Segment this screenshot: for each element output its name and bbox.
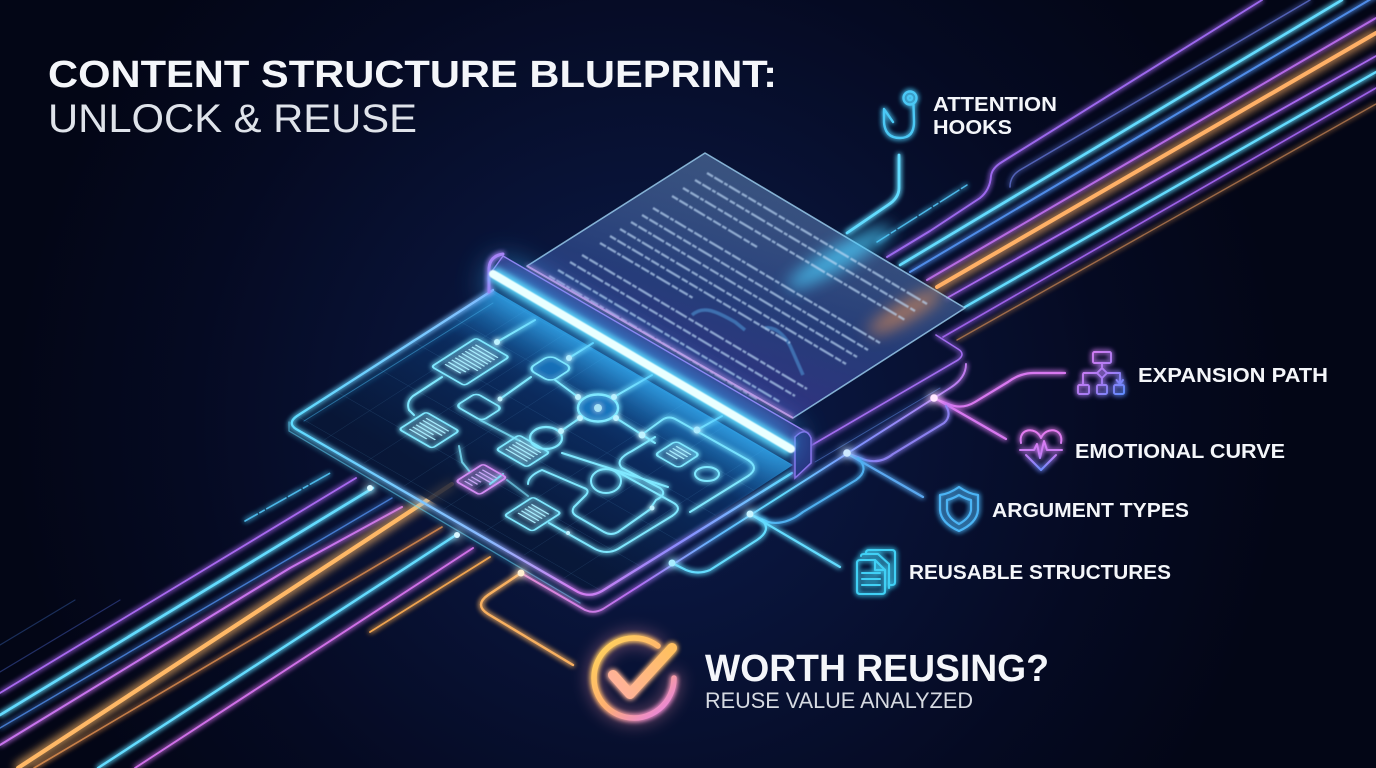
bar core <box>493 274 791 449</box>
bar housing <box>490 256 808 452</box>
panel: scanner bar <box>489 254 811 478</box>
icon: fish hook <box>884 92 916 138</box>
icon: document stack <box>857 550 895 594</box>
plate edges <box>289 290 792 603</box>
connector: lower loop <box>672 520 766 572</box>
circuit lines: lower left bundle <box>0 472 490 768</box>
title <box>48 54 777 141</box>
sheet lower edge highlight <box>527 266 793 418</box>
title line 2: UNLOCK & REUSE <box>48 97 417 141</box>
label: emotional curve <box>1020 430 1285 470</box>
connector: hook to sheet <box>847 155 899 233</box>
plate surface <box>290 290 793 595</box>
flowchart <box>399 320 754 552</box>
icon: heart with pulse <box>1020 430 1062 470</box>
bar glow <box>492 273 792 450</box>
right end cap <box>795 432 811 478</box>
outer rim circuit <box>521 364 966 612</box>
sheet highlights <box>692 217 946 375</box>
flow nodes <box>456 355 719 493</box>
panel: blueprint plate with flowchart <box>289 285 800 603</box>
document nodes <box>431 338 509 386</box>
label: expansion path <box>1078 352 1328 394</box>
label: attention hooks: HOOKS <box>933 117 1012 139</box>
arrowheads and junctions <box>494 339 700 535</box>
circuit lines: upper right bundle <box>877 0 1376 340</box>
label text: REUSABLE STRUCTURES <box>909 562 1171 584</box>
connector: purple return <box>847 406 949 461</box>
label text: ATTENTION <box>933 94 1057 116</box>
left end cap <box>489 254 503 292</box>
connectors <box>408 320 754 552</box>
callout subtext: REUSE VALUE ANALYZED <box>705 688 973 713</box>
connector: emotional curve <box>940 401 1006 439</box>
connector lines to labels <box>481 364 1065 665</box>
label: attention hooks <box>884 92 1057 139</box>
icon: flow diagram <box>1078 352 1124 394</box>
label text: ARGUMENT TYPES <box>992 500 1189 522</box>
connector nodes <box>367 394 938 576</box>
lower tray behind sheet <box>800 335 962 462</box>
callout heading: WORTH REUSING? <box>705 648 1049 690</box>
title line 1: CONTENT STRUCTURE BLUEPRINT: <box>48 54 777 96</box>
connector: expansion path <box>933 373 1065 407</box>
icon: check mark in ring <box>594 638 674 718</box>
sheet body text lines <box>549 173 927 402</box>
label text: EXPANSION PATH <box>1138 365 1328 387</box>
label: argument types <box>940 487 1189 531</box>
connector: worth reusing <box>481 573 573 665</box>
connector: reusable structures <box>750 514 840 567</box>
panel: source document sheet <box>527 153 965 418</box>
icon: shield <box>940 487 978 531</box>
connector: argument types <box>848 454 923 497</box>
label: reusable structures <box>857 550 1171 594</box>
label text: EMOTIONAL CURVE <box>1075 441 1285 463</box>
sheet surface <box>527 153 965 418</box>
callout: worth reusing <box>594 638 1049 718</box>
connector: reusable curve <box>750 458 864 523</box>
